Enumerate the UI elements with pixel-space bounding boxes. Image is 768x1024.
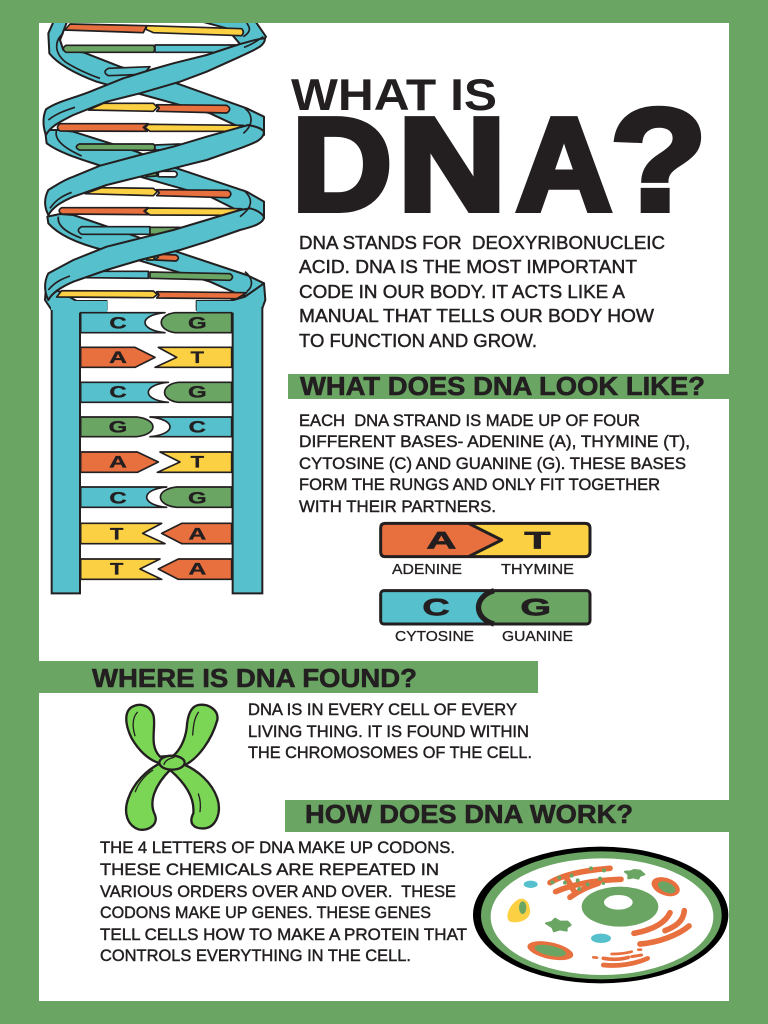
legend: cytosine guanine pair: CYTOSINE: [395, 628, 474, 645]
text block: four bases: [299, 411, 690, 516]
ribbon highlight lines: [48, 23, 263, 292]
text block: how DNA works: CONTROLS EVERYTHING IN THE CELL.: [100, 946, 411, 965]
legend: adenine thymine pair: A: [426, 527, 456, 554]
rung C-G: [81, 313, 232, 333]
text block: how DNA works: TELL CELLS HOW TO MAKE A PROTEIN THAT: [100, 925, 467, 944]
rung T-A: [81, 559, 232, 579]
legend: adenine thymine pair: THYMINE: [501, 561, 574, 578]
rung T-A: [81, 523, 232, 544]
icon: DNA double helix: [43, 18, 266, 313]
text block: how DNA works: CODONS MAKE UP GENES. THESE GENES: [100, 903, 431, 922]
text block: how DNA works: THESE CHEMICALS ARE REPEATED IN: [100, 860, 439, 879]
text block: where DNA is found: DNA IS IN EVERY CELL OF EVERY: [248, 700, 517, 719]
title: ?: [610, 79, 707, 241]
rung T-A: T: [110, 524, 123, 543]
legend: cytosine guanine pair: C: [422, 594, 450, 621]
title: A: [516, 91, 612, 238]
icon: chromosome: [126, 705, 219, 830]
title: [291, 71, 707, 241]
rung G-C: [81, 417, 232, 437]
title: N: [398, 91, 506, 238]
legend: adenine thymine pair: ADENINE: [392, 561, 462, 578]
rung C-G: C: [109, 313, 127, 332]
heading: how does DNA work: [285, 799, 729, 832]
text block: definition: CODE IN OUR BODY. IT ACTS LIKE A: [299, 282, 625, 302]
rung C-G: [81, 382, 232, 402]
text block: four bases: CYTOSINE (C) AND GUANINE (G). THESE BASES: [299, 454, 686, 473]
heading: where is DNA found: WHERE IS DNA FOUND?: [92, 663, 417, 693]
legend: cytosine guanine pair: G: [520, 594, 551, 621]
rung T-A: A: [188, 559, 206, 578]
heading: what does DNA look like: WHAT DOES DNA LOOK LIKE?: [300, 371, 705, 401]
text block: four bases: WITH THEIR PARTNERS.: [299, 497, 496, 516]
text block: four bases: EACH DNA STRAND IS MADE UP OF FOUR: [299, 411, 640, 430]
rung T-A: A: [188, 524, 206, 543]
text block: definition: ACID. DNA IS THE MOST IMPORTANT: [299, 257, 637, 277]
rung G-C: G: [109, 417, 127, 436]
text block: where DNA is found: THE CHROMOSOMES OF THE CELL.: [248, 743, 532, 762]
ladder posts: [52, 307, 262, 593]
rung C-G: G: [188, 488, 207, 507]
rung C-G: C: [109, 488, 127, 507]
legend: cytosine guanine pair: [381, 591, 590, 645]
rung C-G: G: [188, 313, 207, 332]
back ribbons of helix: [45, 18, 266, 310]
rung C-G: [81, 487, 232, 507]
legend: adenine thymine pair: [381, 523, 590, 578]
endoplasmic reticulum: [550, 868, 689, 965]
text block: how DNA works: THE 4 LETTERS OF DNA MAKE UP CODONS.: [100, 838, 455, 857]
heading: where is DNA found: [39, 661, 538, 693]
rung A-T: T: [191, 453, 204, 472]
rung A-T: T: [191, 348, 204, 367]
helix rungs: [57, 24, 247, 299]
heading: how does DNA work: HOW DOES DNA WORK?: [305, 799, 633, 829]
rung A-T: A: [109, 348, 127, 367]
rung C-G: G: [188, 383, 207, 402]
text block: definition: TO FUNCTION AND GROW.: [299, 331, 537, 351]
title: D: [292, 91, 392, 238]
rung A-T: [81, 452, 232, 472]
text block: where DNA is found: [248, 700, 532, 762]
rung A-T: A: [109, 453, 127, 472]
text block: definition: MANUAL THAT TELLS OUR BODY HOW: [299, 306, 654, 326]
nucleus: [582, 887, 658, 927]
text block: definition: DNA STANDS FOR DEOXYRIBONUCLEIC: [299, 233, 665, 253]
rung C-G: C: [109, 383, 127, 402]
patches above ladder: [51, 301, 262, 313]
title: WHAT IS: [291, 71, 497, 120]
front ribbons of helix: [43, 38, 265, 300]
icon: animal cell: [473, 847, 728, 983]
rung T-A: T: [110, 559, 123, 578]
text block: where DNA is found: LIVING THING. IT IS FOUND WITHIN: [248, 722, 529, 741]
ribosome dots: [550, 866, 606, 891]
text block: four bases: DIFFERENT BASES- ADENINE (A), THYMINE (T),: [299, 432, 690, 451]
text block: how DNA works: [100, 838, 467, 965]
rung G-C: C: [189, 417, 206, 436]
legend: cytosine guanine pair: GUANINE: [502, 628, 573, 645]
text block: definition: [299, 233, 665, 351]
organelles: [507, 870, 682, 964]
legend: adenine thymine pair: T: [524, 527, 551, 554]
icon: DNA ladder with base pairs: [52, 307, 262, 593]
text block: four bases: FORM THE RUNGS AND ONLY FIT TOGETHER: [299, 475, 660, 494]
text block: how DNA works: VARIOUS ORDERS OVER AND OVER. THESE: [100, 882, 456, 901]
rung A-T: [81, 347, 232, 367]
